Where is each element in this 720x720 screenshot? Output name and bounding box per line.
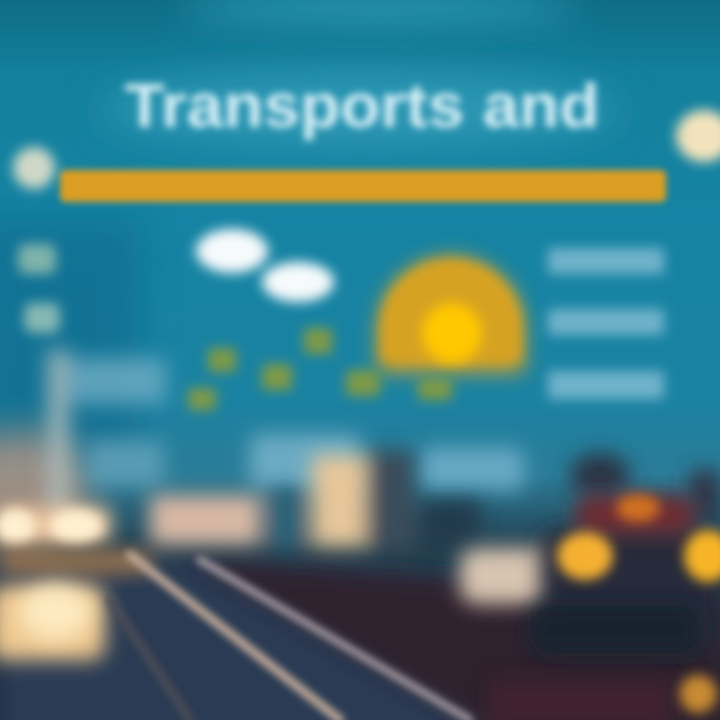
title: Transports and [124, 72, 600, 141]
background haze [0, 0, 620, 550]
banner left icon [13, 147, 55, 189]
banner: orange bar [60, 170, 666, 202]
road surface [0, 555, 720, 720]
road markings [110, 555, 470, 720]
left street lights [0, 508, 150, 660]
banner right icon [676, 110, 720, 162]
left column panel [48, 350, 166, 520]
right text lines [548, 248, 664, 399]
bottom right glow [679, 675, 717, 713]
sun icon [378, 257, 524, 372]
lower label panels [250, 434, 524, 490]
left column icons [18, 244, 60, 333]
line chart markers [188, 328, 452, 410]
car [460, 494, 720, 653]
clouds [196, 229, 334, 302]
bottom right road tint [490, 680, 670, 720]
distant buildings and traffic [150, 450, 720, 550]
